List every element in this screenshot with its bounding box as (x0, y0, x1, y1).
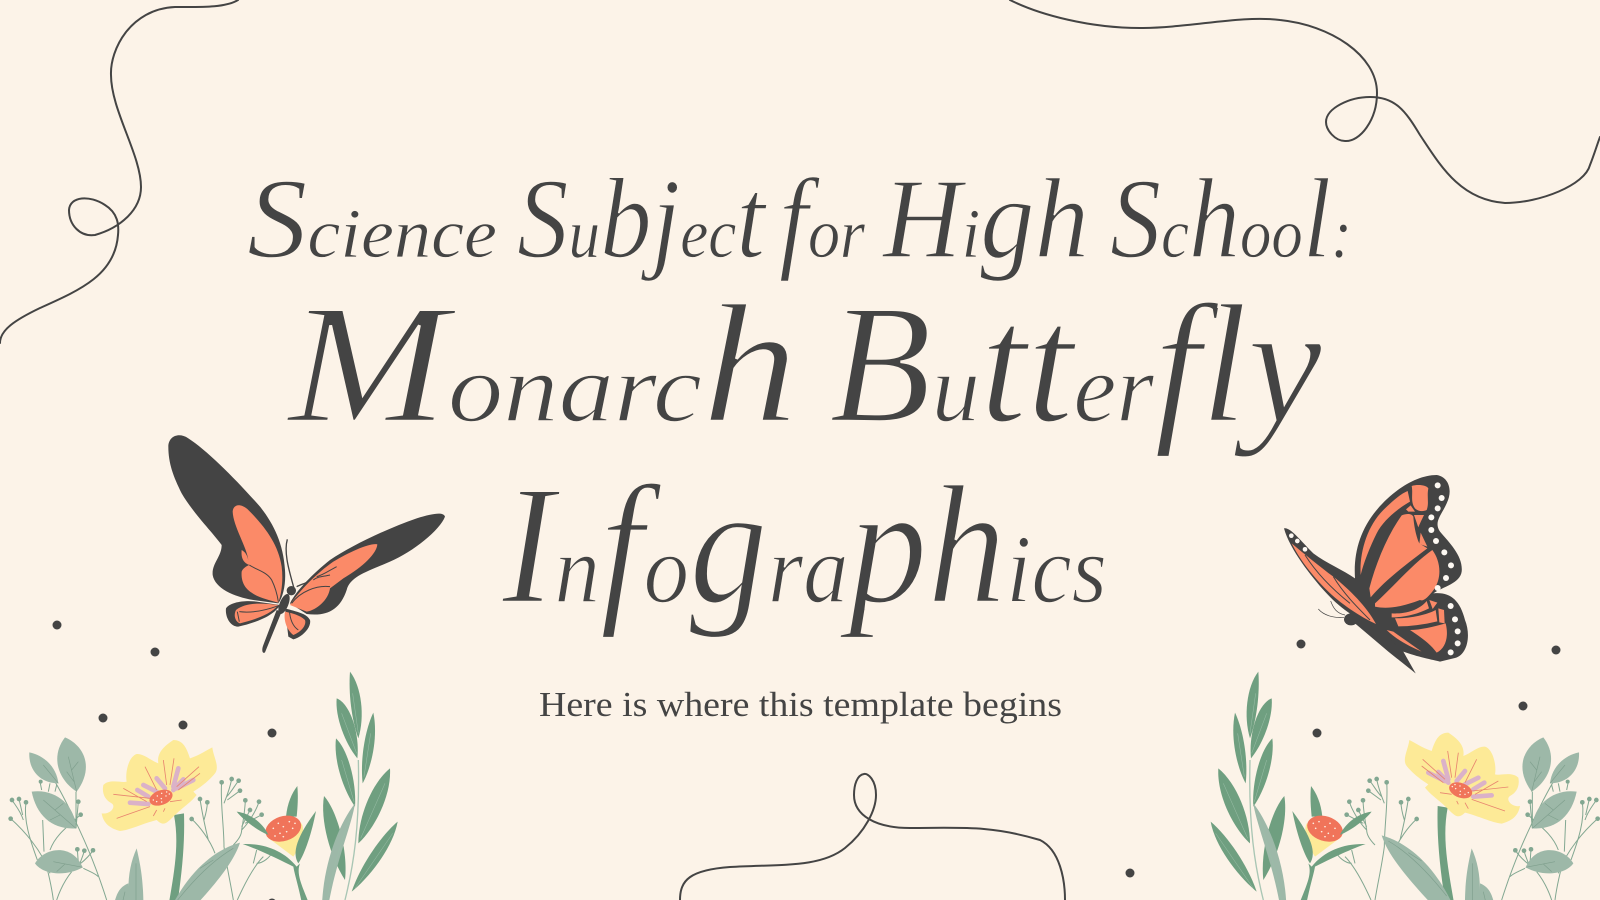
plants: bottom left (8, 672, 398, 900)
title line 1: High (881, 155, 1089, 282)
title line 1: for (779, 155, 866, 282)
title line 2: Butterfly (829, 270, 1323, 458)
decorative dots (52, 620, 1560, 900)
curve: top left (0, 0, 238, 343)
title line 2: Monarch (286, 270, 798, 458)
title line 1: School: (1110, 155, 1352, 282)
title line 2 (286, 270, 1323, 458)
title line 1: Subject (517, 155, 767, 282)
butterfly: right (1284, 475, 1468, 673)
title line 1: Science (247, 155, 497, 282)
plants: bottom right (1211, 672, 1600, 900)
title line 1 (247, 155, 1352, 282)
title line 3: Infographics (501, 451, 1107, 639)
curve: bottom (680, 774, 1065, 900)
butterfly: left (168, 435, 445, 653)
curve: top right (1010, 0, 1600, 203)
subtitle: Here is where this template begins (539, 685, 1062, 724)
